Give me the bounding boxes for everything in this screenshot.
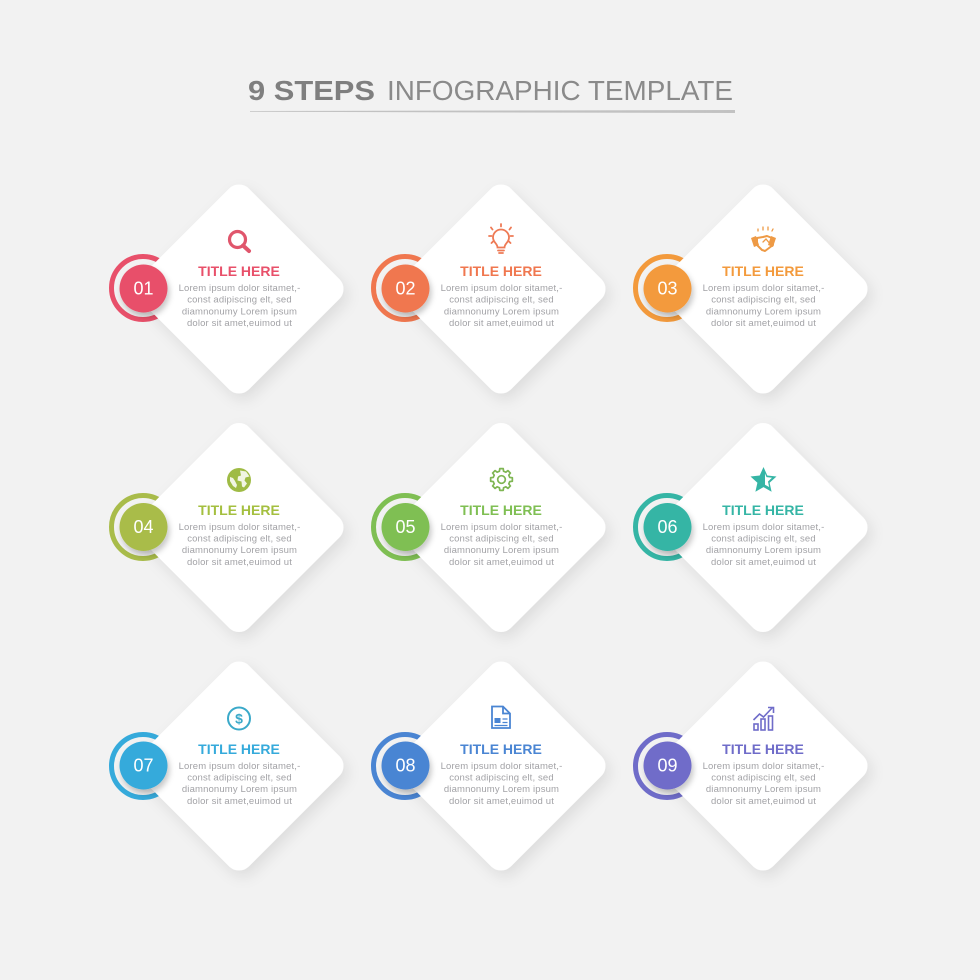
number badge 09: [644, 742, 692, 790]
body 02: Lorem ipsum dolor sitamet,-: [441, 283, 562, 294]
title underline: [250, 110, 735, 113]
body 05: dolor sit amet,euimod ut: [449, 557, 554, 568]
title: 9 STEPS: [248, 75, 375, 106]
number badge 06: 06: [657, 517, 678, 537]
number badge 02: 02: [395, 278, 416, 298]
body 05: const adipiscing elt, sed: [449, 534, 554, 544]
body 06: const adipiscing elt, sed: [711, 534, 816, 544]
body 06: [703, 522, 824, 568]
body 06: dolor sit amet,euimod ut: [711, 557, 816, 568]
ring 08: [374, 734, 436, 798]
icon: light bulb: [489, 224, 513, 253]
number badge 06: [644, 503, 692, 551]
diamond panel 09: [653, 656, 873, 876]
card 07: [112, 656, 349, 876]
number badge 01: 01: [133, 278, 154, 298]
number badge 08: 08: [395, 756, 416, 776]
number badge 02: [382, 264, 430, 312]
title 07: TITLE HERE: [198, 741, 280, 757]
card 09: [636, 656, 873, 876]
body 08: [441, 761, 562, 807]
body 06: diamnonumy Lorem ipsum: [706, 545, 821, 556]
body 02: dolor sit amet,euimod ut: [449, 318, 554, 329]
diamond panel 03: [653, 179, 873, 399]
body 05: diamnonumy Lorem ipsum: [444, 545, 559, 556]
diamond panel 01: [129, 179, 349, 399]
body 04: const adipiscing elt, sed: [187, 534, 292, 544]
title: INFOGRAPHIC TEMPLATE: [387, 75, 733, 106]
body 02: const adipiscing elt, sed: [449, 294, 554, 306]
body 03: [703, 283, 824, 329]
body 01: diamnonumy Lorem ipsum: [182, 306, 297, 318]
diamond panel 07: [129, 656, 349, 876]
ring 04: [112, 496, 174, 558]
body 08: Lorem ipsum dolor sitamet,-: [441, 761, 562, 772]
icon: handshake: [751, 227, 776, 251]
body 08: diamnonumy Lorem ipsum: [444, 784, 559, 795]
number badge 04: [120, 503, 168, 551]
body 09: diamnonumy Lorem ipsum: [706, 784, 821, 795]
icon: growth chart: [754, 708, 774, 730]
title 05: TITLE HERE: [460, 502, 542, 518]
icon: document: [492, 706, 510, 728]
number badge 09: 09: [657, 756, 678, 776]
ring 06: [636, 496, 698, 558]
card 03: [636, 179, 873, 399]
body 07: dolor sit amet,euimod ut: [187, 796, 292, 807]
number badge 08: [382, 742, 430, 790]
body 09: dolor sit amet,euimod ut: [711, 796, 816, 807]
card 05: [374, 417, 611, 638]
number badge 03: 03: [657, 278, 678, 298]
body 01: dolor sit amet,euimod ut: [187, 318, 292, 329]
body 04: Lorem ipsum dolor sitamet,-: [179, 522, 300, 533]
body 01: Lorem ipsum dolor sitamet,-: [179, 283, 300, 294]
body 01: [179, 283, 300, 329]
body 04: dolor sit amet,euimod ut: [187, 557, 292, 568]
number badge 03: [644, 264, 692, 312]
body 01: const adipiscing elt, sed: [187, 294, 292, 306]
body 03: const adipiscing elt, sed: [711, 294, 816, 306]
number badge 07: 07: [133, 756, 154, 776]
body 07: const adipiscing elt, sed: [187, 772, 292, 784]
body 07: Lorem ipsum dolor sitamet,-: [179, 761, 300, 772]
body 03: diamnonumy Lorem ipsum: [706, 306, 821, 318]
number badge 05: [382, 503, 430, 551]
title 02: TITLE HERE: [460, 263, 542, 279]
ring 07: [112, 734, 174, 798]
body 02: diamnonumy Lorem ipsum: [444, 306, 559, 318]
number badge 01: [120, 264, 168, 312]
icon: dollar coin: [228, 708, 250, 730]
diamond panel 02: [391, 179, 611, 399]
body 09: [703, 761, 824, 807]
ring 02: [374, 256, 436, 320]
body 04: [179, 522, 300, 568]
icon: dollar coin: $: [235, 710, 243, 726]
body 08: dolor sit amet,euimod ut: [449, 796, 554, 807]
body 09: const adipiscing elt, sed: [711, 772, 816, 784]
body 05: Lorem ipsum dolor sitamet,-: [441, 522, 562, 533]
body 02: [441, 283, 562, 329]
body 05: [441, 522, 562, 568]
title 08: TITLE HERE: [460, 741, 542, 757]
number badge 07: [120, 742, 168, 790]
body 06: Lorem ipsum dolor sitamet,-: [703, 522, 824, 533]
icon: globe: [227, 468, 251, 492]
body 07: [179, 761, 300, 807]
diamond panel 06: [653, 417, 873, 638]
icon: star: [750, 467, 776, 492]
card 04: [112, 417, 349, 638]
ring 09: [636, 734, 698, 798]
diamond panel 08: [391, 656, 611, 876]
title 03: TITLE HERE: [722, 263, 804, 279]
body 03: dolor sit amet,euimod ut: [711, 318, 816, 329]
number badge 05: 05: [395, 517, 416, 537]
card 06: [636, 417, 873, 638]
title 01: TITLE HERE: [198, 263, 280, 279]
title 09: TITLE HERE: [722, 741, 804, 757]
body 04: diamnonumy Lorem ipsum: [182, 545, 297, 556]
body 07: diamnonumy Lorem ipsum: [182, 784, 297, 795]
body 03: Lorem ipsum dolor sitamet,-: [703, 283, 824, 294]
icon: gear: [491, 469, 512, 490]
diamond panel 05: [391, 417, 611, 638]
body 08: const adipiscing elt, sed: [449, 772, 554, 784]
body 09: Lorem ipsum dolor sitamet,-: [703, 761, 824, 772]
ring 05: [374, 496, 436, 558]
ring 01: [112, 256, 174, 320]
title 06: TITLE HERE: [722, 502, 804, 518]
title 04: TITLE HERE: [198, 502, 280, 518]
number badge 04: 04: [133, 517, 154, 537]
diamond panel 04: [129, 417, 349, 638]
card 02: [374, 179, 611, 399]
icon: magnifier: [230, 232, 249, 251]
card 01: [112, 179, 349, 399]
ring 03: [636, 256, 698, 320]
card 08: [374, 656, 611, 876]
